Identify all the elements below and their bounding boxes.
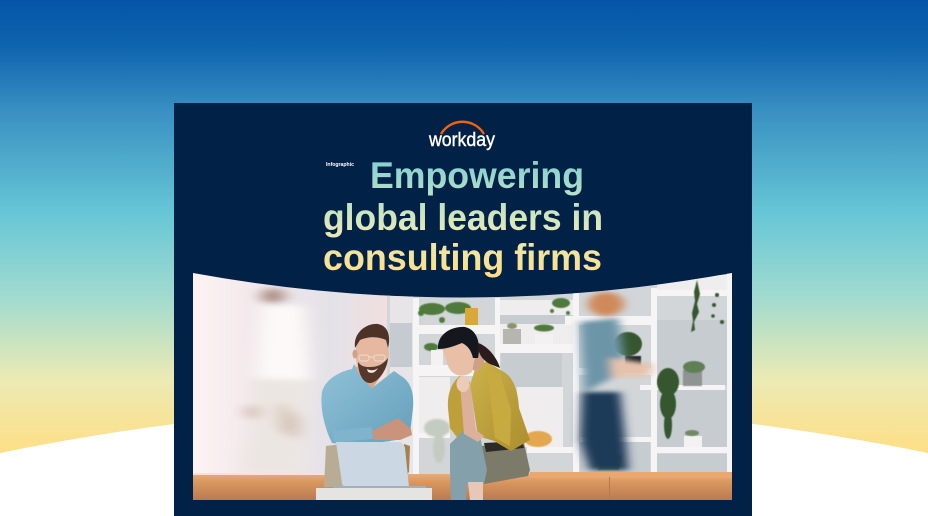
title: consulting firms <box>323 237 602 278</box>
hands <box>372 418 412 440</box>
neck <box>472 352 484 372</box>
white round pedestal <box>316 488 432 500</box>
woman in yellow shirt <box>438 327 530 500</box>
shelving back wall <box>387 270 733 480</box>
title: Empowering <box>370 155 584 196</box>
office wall <box>193 270 390 480</box>
logo: workday: workday <box>428 130 495 151</box>
shirt: back and sleeve <box>470 362 530 451</box>
blurred walking person, left <box>240 288 310 472</box>
belt <box>484 441 524 452</box>
white shelves <box>413 290 732 453</box>
title: global leaders in <box>323 197 603 238</box>
hair <box>438 327 479 358</box>
beard <box>358 358 388 383</box>
label: Infographic: Infographic <box>326 162 354 168</box>
shirt: front <box>448 376 470 444</box>
title <box>323 155 603 278</box>
pale hanging plant <box>424 419 450 463</box>
plaid legs <box>450 430 487 500</box>
white arch at bottom of background <box>0 406 928 516</box>
forearm fold <box>336 427 373 442</box>
photo: colleagues at a laptop in an office <box>193 270 733 500</box>
sofa <box>193 472 733 500</box>
white shelf uprights <box>413 273 732 475</box>
head <box>356 338 389 382</box>
logo: workday <box>428 122 495 151</box>
neck <box>356 366 383 389</box>
thigh <box>480 443 530 484</box>
shirt <box>321 364 413 446</box>
trousers <box>324 444 344 487</box>
laptop <box>333 442 426 488</box>
panel: navy cover <box>174 103 752 516</box>
man in blue shirt <box>321 324 413 487</box>
blurred walking person, right <box>580 292 653 470</box>
glasses <box>359 355 385 361</box>
plants and pots on shelves <box>418 280 724 470</box>
forearm <box>460 384 484 442</box>
hair <box>355 324 389 348</box>
orange cushion on shelf <box>524 431 552 447</box>
hand on chin <box>456 376 470 392</box>
face <box>442 343 475 376</box>
white wall panels behind shelves <box>418 275 727 447</box>
